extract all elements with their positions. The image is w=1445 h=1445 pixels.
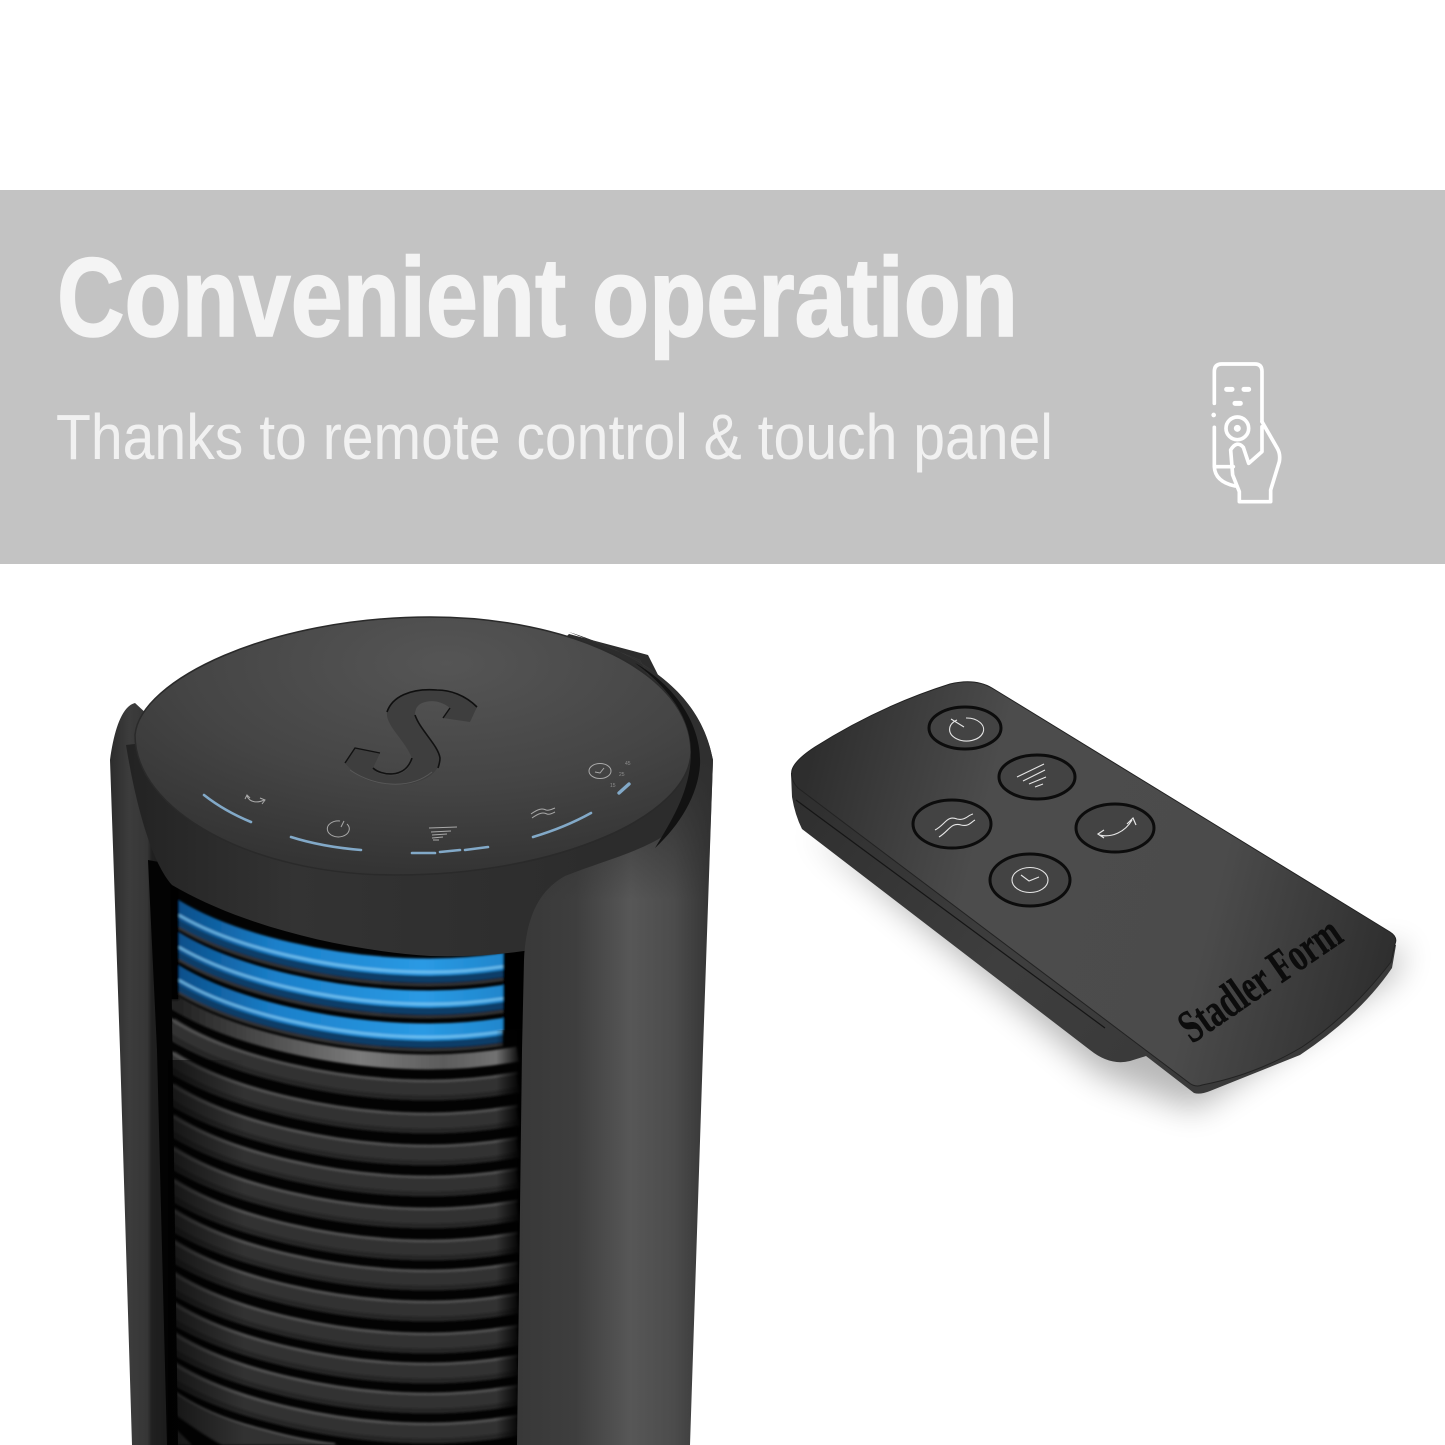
timer labels: 25 [619, 772, 625, 778]
button: wave mode [913, 800, 991, 848]
remote shadow [810, 830, 1405, 1110]
icon: timer [589, 764, 611, 778]
fan left shell [110, 703, 175, 1445]
title: Convenient operation [57, 235, 1018, 360]
remote body side [791, 773, 1396, 1094]
button: power [929, 707, 1001, 749]
remote top face [792, 682, 1396, 1086]
grey header band [0, 190, 1445, 564]
shadow crescent beside disc [635, 663, 700, 848]
fan grille with louvres [148, 860, 530, 1445]
fan top cap side [126, 634, 706, 956]
icon: hand holding remote [1211, 364, 1280, 502]
touch panel icons [245, 764, 611, 840]
fan right rim shading [526, 632, 713, 900]
fan top disc [135, 617, 691, 875]
icon: power [327, 821, 349, 837]
button: swing [1076, 804, 1154, 852]
fan right shell [517, 632, 713, 1445]
icon: wave [531, 808, 555, 818]
button: fan speed [999, 755, 1075, 799]
S logo [345, 690, 477, 785]
timer labels [610, 761, 631, 789]
icon: swing [245, 795, 265, 804]
product: remote control [791, 682, 1405, 1110]
remote brand name: Stadler Form [1169, 907, 1351, 1053]
touch panel light bars [204, 784, 629, 853]
icon: fan speed [429, 827, 457, 840]
timer labels: 45 [625, 761, 631, 767]
subtitle: Thanks to remote control & touch panel [56, 401, 1053, 473]
timer labels: 15 [610, 783, 616, 789]
product: tower fan [110, 617, 713, 1445]
button: timer [990, 854, 1070, 906]
remote seam [796, 800, 1105, 1028]
